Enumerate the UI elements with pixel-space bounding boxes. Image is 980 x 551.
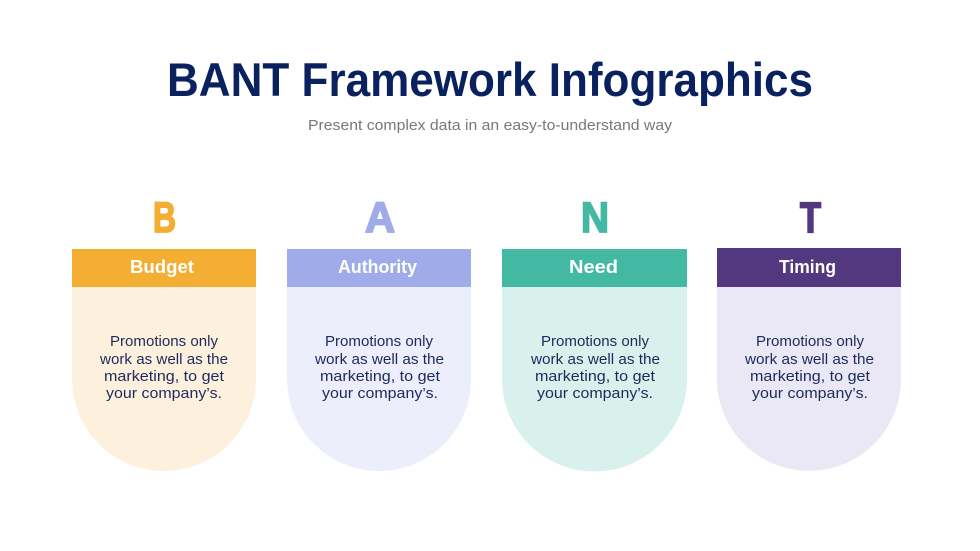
heading: Authority — [338, 257, 417, 277]
header bar — [72, 249, 256, 287]
body text: work as well as the — [314, 351, 444, 368]
title: BANT Framework Infographics — [167, 53, 813, 106]
body text: work as well as the — [99, 351, 228, 368]
body text: Promotions only — [110, 333, 218, 350]
letter B: B — [153, 194, 176, 242]
panel: budget — [72, 194, 256, 471]
body text — [314, 333, 444, 402]
heading: Timing — [779, 257, 836, 277]
body text: marketing, to get — [535, 368, 656, 385]
body text — [99, 333, 228, 402]
card body — [717, 287, 901, 471]
letter T: T — [800, 194, 821, 242]
body text: Promotions only — [756, 333, 864, 350]
body text: marketing, to get — [320, 368, 441, 385]
body text: your company’s. — [537, 385, 653, 402]
heading: Budget — [130, 257, 194, 277]
body text: your company’s. — [322, 385, 438, 402]
body text: marketing, to get — [750, 368, 871, 385]
card body — [502, 287, 687, 472]
heading: Need — [569, 257, 618, 277]
letter A: A — [365, 194, 395, 242]
body text: Promotions only — [325, 333, 433, 350]
card body — [287, 287, 471, 471]
letter N: N — [581, 194, 609, 242]
header bar — [287, 249, 471, 287]
body text: work as well as the — [744, 351, 874, 368]
body text: your company’s. — [106, 385, 222, 402]
panel: need — [502, 194, 687, 472]
body text: your company’s. — [752, 385, 868, 402]
body text — [530, 333, 660, 402]
subtitle: Present complex data in an easy-to-understand way — [308, 117, 673, 134]
body text: Promotions only — [541, 333, 649, 350]
panel: authority — [287, 194, 471, 471]
panel: timing — [717, 194, 901, 471]
body text: marketing, to get — [104, 368, 225, 385]
body text: work as well as the — [530, 351, 660, 368]
header bar — [502, 249, 687, 287]
body text — [744, 333, 874, 402]
header bar — [717, 248, 901, 287]
card body — [72, 287, 256, 471]
